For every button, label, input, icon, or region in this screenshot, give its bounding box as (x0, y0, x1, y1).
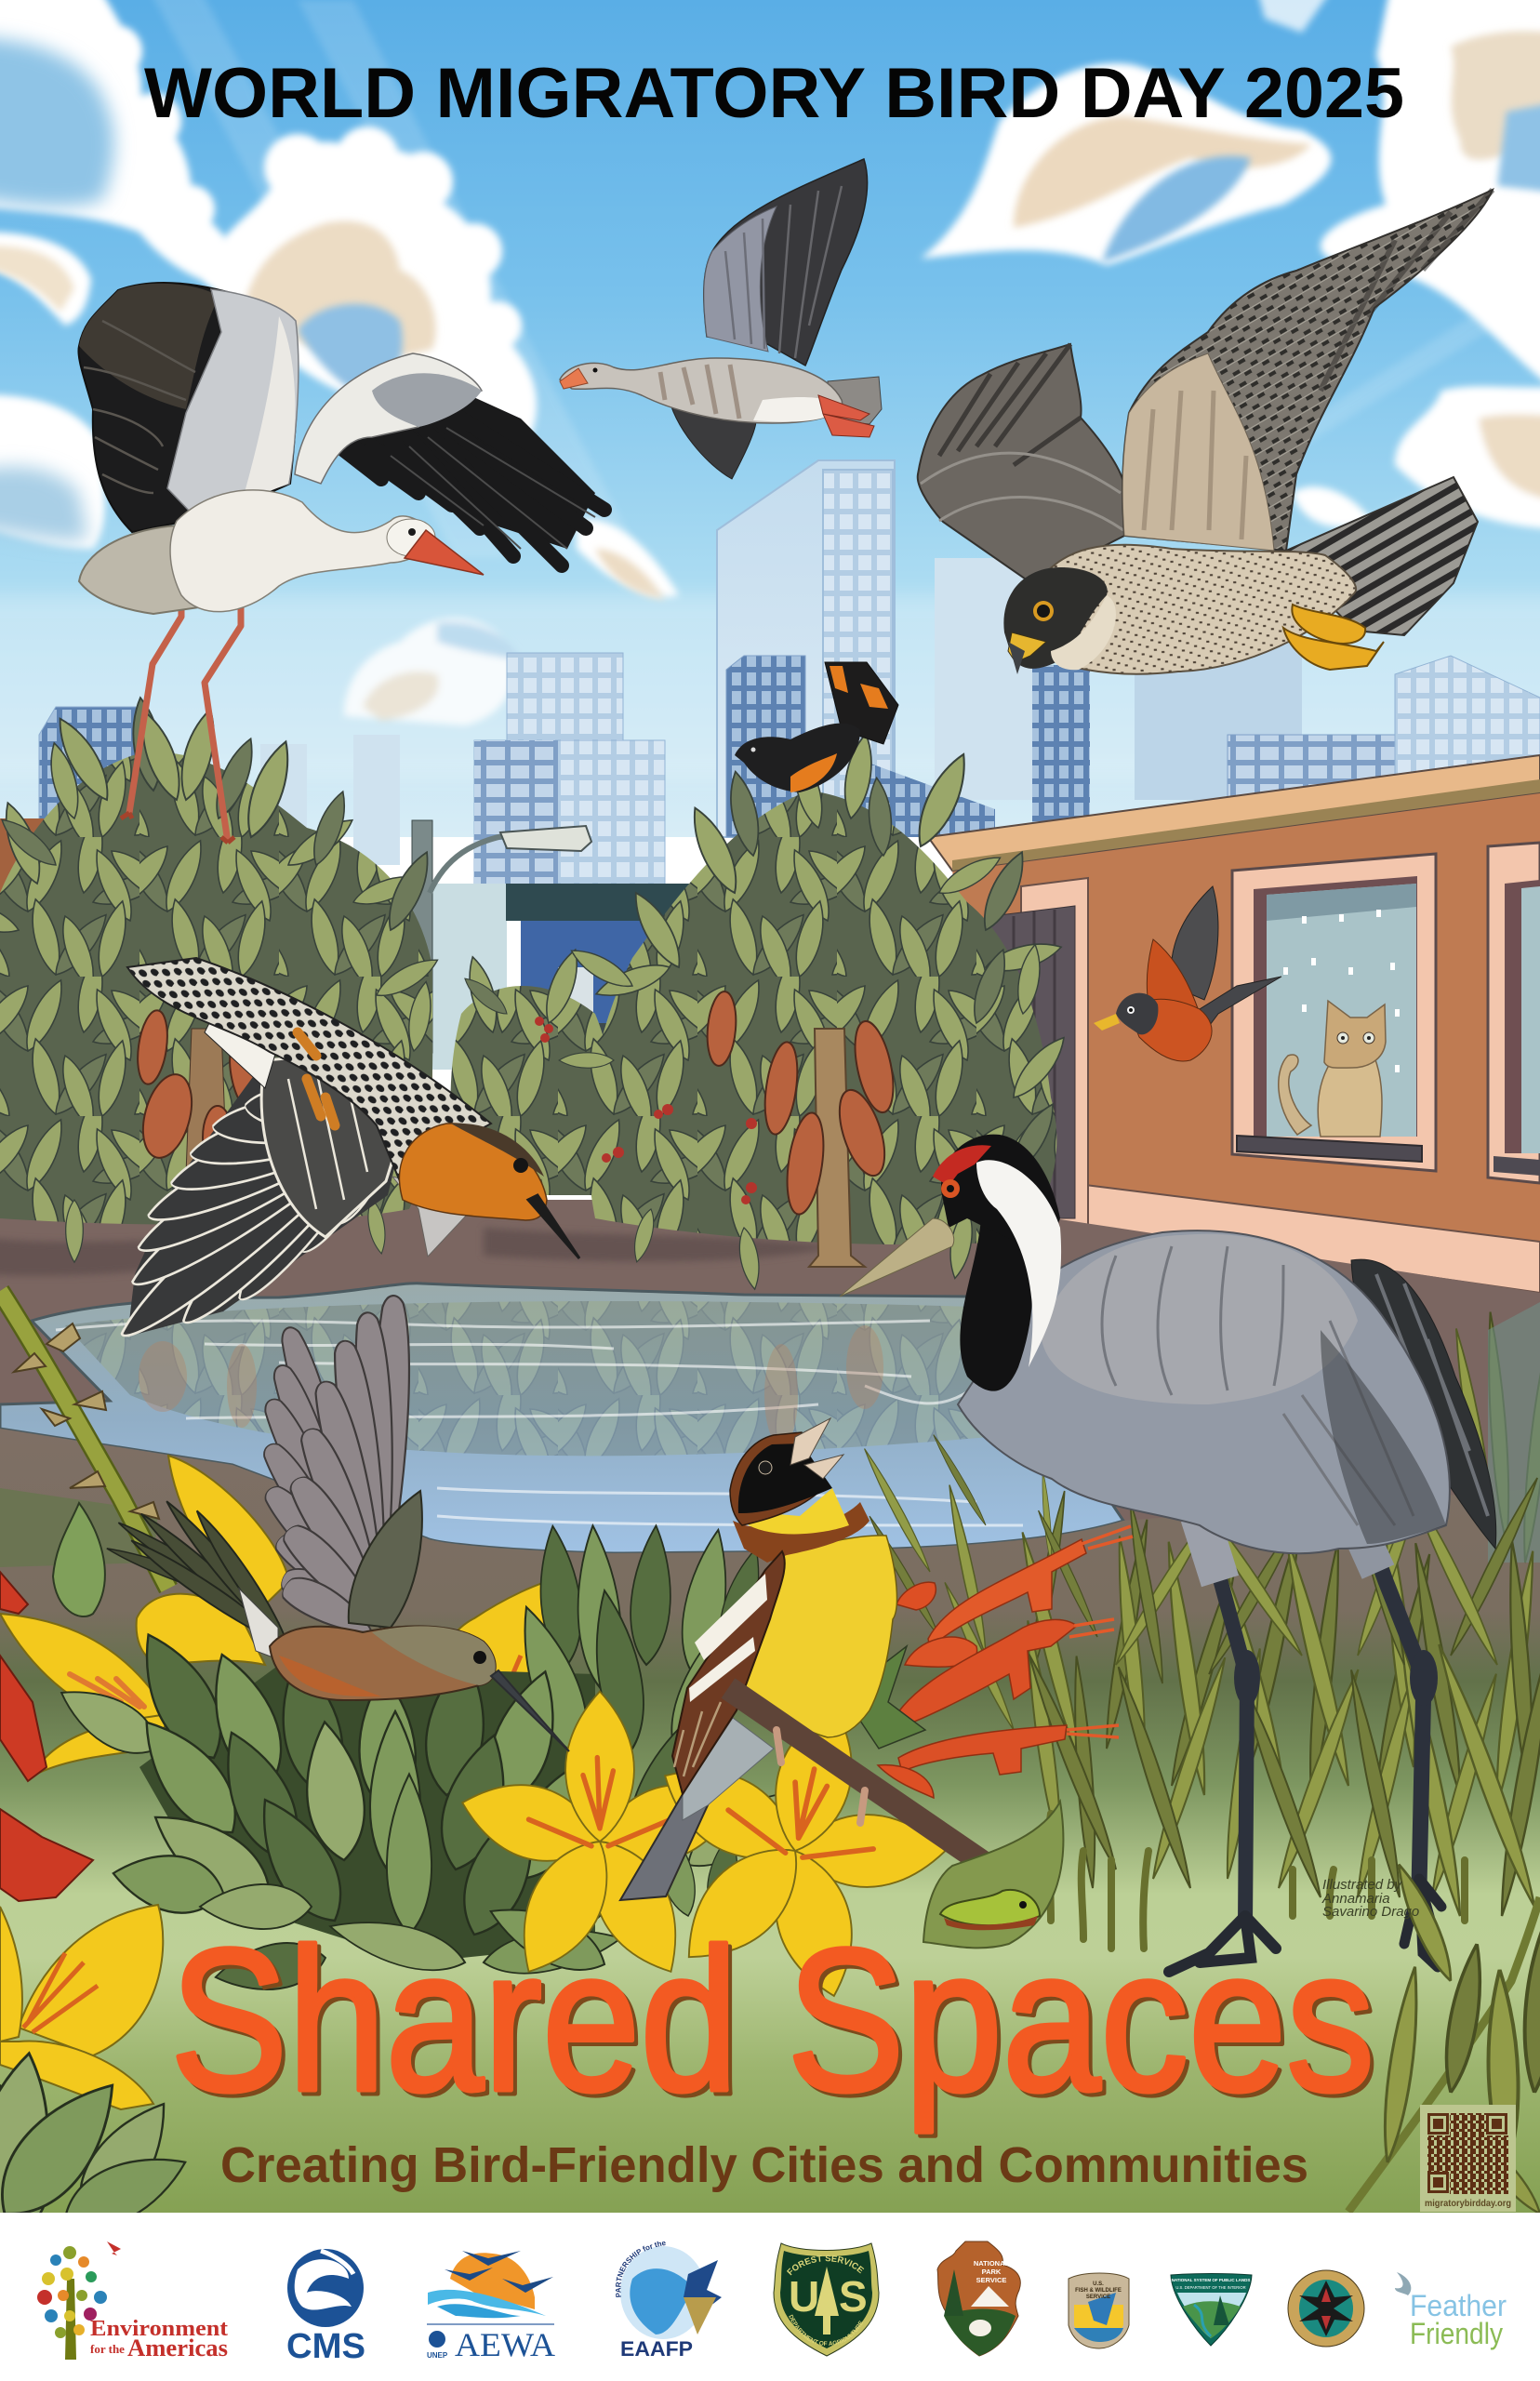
belly grey (683, 1718, 774, 1820)
tail (1286, 477, 1478, 635)
sky background (0, 0, 1540, 837)
flower: lower (878, 1725, 1119, 1798)
peregrine falcon (918, 190, 1493, 674)
leaf on stem (53, 1503, 105, 1616)
near wing (278, 1295, 414, 1647)
common crane (840, 1135, 1496, 1972)
reeds (860, 1433, 1540, 1918)
illustrator credit (1321, 1877, 1419, 1920)
white stripe (976, 1160, 1061, 1367)
window: cat (1232, 854, 1436, 1171)
logo: CMS: CMS (286, 2327, 365, 2366)
logo: US Fish and Wildlife Service (1069, 2273, 1129, 2348)
shorebird (110, 958, 579, 1354)
flower: middle (888, 1619, 1114, 1732)
logo: National Park Service arrowhead: SERVICE (976, 2276, 1006, 2284)
logo: EAAFP (616, 2241, 722, 2361)
head (387, 519, 435, 556)
QR code panel: migratorybirdday.org (1425, 2198, 1511, 2209)
tail (828, 377, 882, 424)
neck (960, 1204, 1032, 1391)
body (1023, 545, 1356, 674)
hummingbird (104, 1295, 569, 1751)
feet (818, 395, 874, 437)
lily flowers back layer (0, 1456, 567, 1776)
big left lily (0, 1614, 168, 1721)
logo: AEWA: UNEP (427, 2351, 448, 2360)
logo: National Park Service arrowhead (937, 2241, 1020, 2356)
subtitle: Creating Bird-Friendly Cities and Communities (220, 2137, 1308, 2193)
leaf with caterpillar (923, 1802, 1063, 1948)
flower behind bill (431, 1577, 567, 1730)
logo: CMS (286, 2249, 365, 2366)
bottom left lily (0, 1905, 163, 2109)
white stork (78, 283, 604, 843)
left red flowers (0, 1572, 93, 1901)
yellow-breasted bunting on branch (620, 1418, 982, 1900)
tree: right cacao (559, 732, 1064, 1291)
sun rays (139, 0, 1540, 670)
logo: Bureau of Land Management: NATIONAL SYSTEM OF PUBLIC LANDS (1172, 2278, 1250, 2282)
near wing (1122, 190, 1493, 551)
green leaf clump (50, 1524, 803, 2000)
body and neck (170, 490, 431, 612)
american redstart (735, 662, 898, 792)
far wing (258, 1323, 382, 1624)
left vine stem (0, 1291, 168, 1616)
title: WORLD MIGRATORY BIRD DAY 2025 (144, 54, 1404, 133)
collar (733, 1502, 870, 1563)
cloud: upper right (921, 63, 1331, 265)
logo: Environment for the Americas (37, 2241, 228, 2361)
logo: US Forest Service shield: DEPARTMENT OF AGRICULTURE (789, 2314, 863, 2346)
spear leaves behind bunting (505, 1524, 803, 1881)
head (941, 1135, 1060, 1256)
street lamp (412, 820, 591, 1053)
illustrator credit: Illustrated by (1322, 1877, 1403, 1893)
cat (1279, 1001, 1386, 1137)
legs (129, 595, 241, 843)
body (270, 1626, 496, 1700)
house with windows (928, 755, 1540, 1293)
wing (672, 1551, 785, 1794)
logo: Feather Friendly: Friendly (1410, 2317, 1503, 2350)
headline: Shared Spaces: Shared Spaces (174, 1911, 1378, 2137)
cacao trees (0, 696, 1072, 1291)
body (958, 1230, 1450, 1553)
tail (620, 1794, 708, 1900)
orange tubular flowers (0, 1526, 1133, 1901)
sepals (846, 1646, 925, 1749)
logo: US Forest Service shield: FOREST SERVICE (787, 2255, 865, 2275)
logo: Feather Friendly (1395, 2272, 1507, 2350)
logo: Bureau of Land Management: U.S. DEPARTMENT OF THE INTERIOR (1175, 2285, 1246, 2290)
far wing (668, 393, 756, 479)
bill (528, 1195, 579, 1258)
beak (790, 1418, 843, 1479)
far wing (918, 344, 1124, 583)
logo: US Forest Service shield: U (789, 2272, 819, 2321)
bill (405, 530, 484, 575)
talons (1283, 605, 1384, 670)
ground (0, 1200, 1540, 1581)
flank (239, 1589, 278, 1659)
bottom corner leaves (0, 2047, 196, 2242)
feet (1169, 1916, 1276, 1972)
bill (560, 368, 588, 389)
flower: upper (905, 1526, 1133, 1667)
logo: AEWA: AEWA (455, 2326, 555, 2363)
window: right edge (1488, 843, 1540, 1183)
clouds (0, 0, 1540, 781)
right wing (295, 353, 604, 565)
head (400, 1124, 547, 1220)
petal behind hummingbird (168, 1456, 289, 1618)
logo: Environment for the Americas: Environment (90, 2317, 228, 2341)
logo: Bureau of Land Management (1171, 2273, 1252, 2346)
caterpillar (940, 1890, 1040, 1925)
plant stems in front of reeds (1049, 1814, 1465, 1949)
body (745, 1536, 896, 1737)
wing coverts (349, 1491, 422, 1628)
cloud: top right (1253, 0, 1540, 409)
cloud: lower right (1293, 386, 1540, 530)
large reeds bottom right (1348, 1860, 1540, 2219)
logo band (0, 2213, 1540, 2381)
american robin (1094, 886, 1281, 1061)
tail feathers (104, 1496, 295, 1653)
flower: bud (896, 1582, 936, 1610)
bill (491, 1670, 569, 1751)
logo: Environment for the Americas: Americas (127, 2334, 228, 2361)
logo: Feather Friendly: Feather (1410, 2289, 1507, 2322)
body (560, 358, 843, 423)
teal reeds behind crane (1450, 1302, 1540, 1563)
logo: Partners in Flight emblem (1288, 2270, 1364, 2347)
wall (952, 791, 1540, 1246)
headline: Shared Spaces: Shared Spaces (170, 1908, 1374, 2134)
logo: EAAFP: PARTNERSHIP for the (616, 2241, 666, 2297)
pond with reflections (0, 1284, 1123, 1553)
logo: National Park Service arrowhead: NATIONAL (974, 2259, 1010, 2268)
roof (928, 755, 1540, 871)
leaves overlapping house (966, 946, 1072, 1177)
red crown (933, 1145, 991, 1186)
QR code panel (1420, 2105, 1516, 2212)
illustrator credit: Annamaria (1321, 1891, 1390, 1907)
wing fan (110, 1051, 409, 1354)
cloud: lower centre (344, 619, 521, 725)
tree: left cacao (0, 696, 443, 1262)
logo: National Park Service arrowhead: PARK (982, 2268, 1002, 2276)
logo: US Forest Service shield: S (839, 2272, 868, 2321)
bill (840, 1218, 954, 1297)
logo: AEWA (427, 2251, 555, 2363)
left wing (78, 283, 298, 532)
skyline buildings (39, 460, 1540, 884)
blue shed (506, 884, 711, 1163)
logo: US Fish and Wildlife Service: FISH & WILDLIFE (1075, 2288, 1122, 2294)
tail plume (1351, 1259, 1496, 1549)
white under tail (392, 1177, 481, 1257)
building: big tower (717, 460, 895, 837)
branch (728, 1688, 982, 1862)
lower meadow background (0, 1429, 1540, 2218)
logo: US Forest Service shield (774, 2242, 880, 2357)
throat (745, 1488, 849, 1534)
door (991, 878, 1088, 1228)
illustrator credit: Savarino Drago (1322, 1904, 1419, 1920)
beak (1008, 632, 1046, 662)
lily flowers front layer (0, 1666, 983, 2109)
cloud: centre left (205, 126, 679, 600)
logo: Environment for the Americas: for the (90, 2342, 125, 2356)
logo: US Fish and Wildlife Service: U.S. (1093, 2281, 1104, 2287)
toes (777, 1730, 865, 1823)
logo: US Fish and Wildlife Service: SERVICE (1086, 2295, 1110, 2300)
back (127, 958, 491, 1181)
greylag goose (560, 159, 882, 479)
near wing (704, 159, 868, 366)
cloud: top left (0, 0, 256, 549)
haze: horizon (0, 595, 1540, 781)
tail (79, 525, 219, 614)
neighbourhood buildings behind trees (0, 818, 711, 1209)
base trim (1075, 1185, 1540, 1293)
logo: EAAFP: EAAFP (620, 2337, 693, 2361)
head (1003, 567, 1108, 669)
legs (1169, 1516, 1441, 1972)
tree: small bush (450, 946, 615, 1195)
head (730, 1432, 823, 1525)
